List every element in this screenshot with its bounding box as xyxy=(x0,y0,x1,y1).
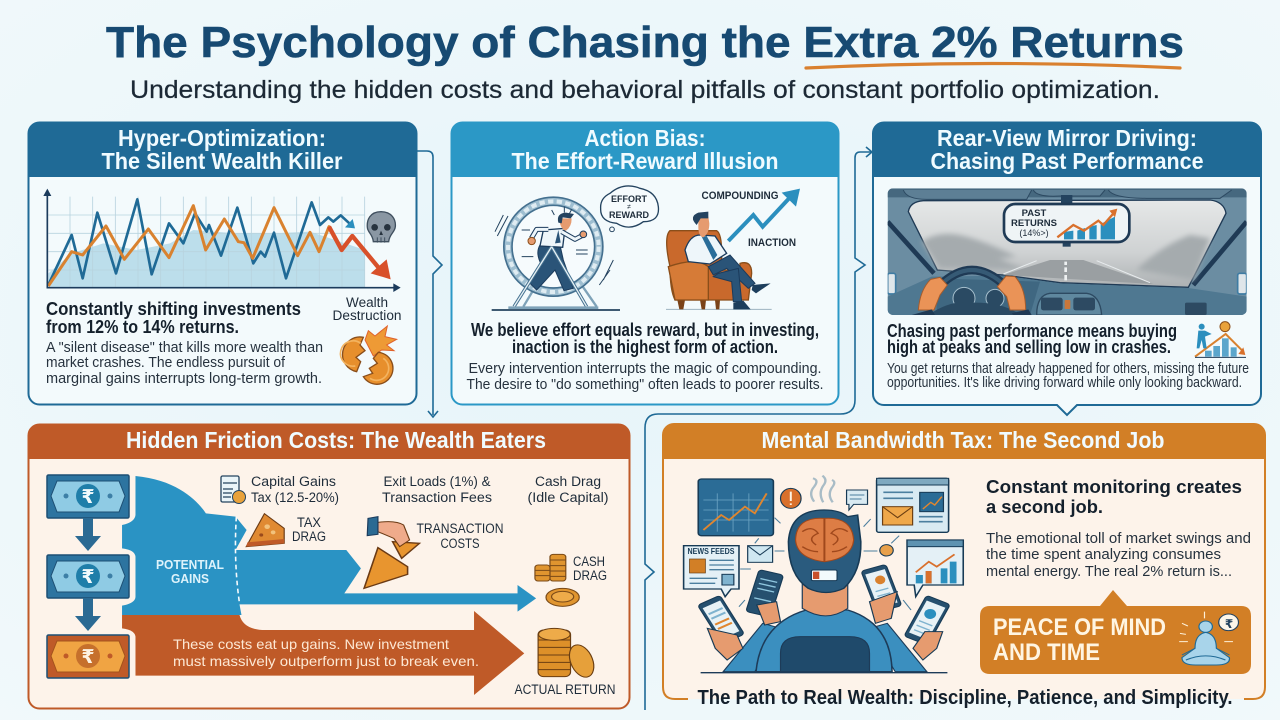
arrow text: must massively outperform just to break even. xyxy=(173,653,479,669)
icon: hand taking slice xyxy=(364,517,419,588)
body detail text: marginal gains interrupts long-term growth. xyxy=(46,370,322,387)
panel heading xyxy=(102,125,343,174)
phones xyxy=(698,595,744,644)
panel heading: Hyper-Optimization: xyxy=(118,125,326,151)
body bold text xyxy=(46,299,301,337)
thought bubble: effort not reward: EFFORT xyxy=(611,194,647,204)
body detail text xyxy=(46,339,323,387)
label: exit loads: Transaction Fees xyxy=(382,490,492,505)
label: transaction costs xyxy=(416,521,504,551)
icon: climbing investor with peak xyxy=(1195,322,1246,357)
body bold text: inaction is the highest form of action. xyxy=(512,337,778,357)
label: cash drag: CASH xyxy=(573,554,605,569)
panel: rear-view mirror driving xyxy=(873,122,1261,415)
icon: tax document xyxy=(221,476,246,504)
arms and body xyxy=(723,623,927,672)
body detail text xyxy=(466,360,824,393)
panel frame xyxy=(663,424,1265,699)
thought bubble: effort not reward: ≠ xyxy=(627,204,631,211)
arrow text xyxy=(173,636,479,669)
arrow: down xyxy=(75,598,101,631)
label: cash drag xyxy=(573,554,607,583)
panel heading: Chasing Past Performance xyxy=(930,148,1204,174)
label: exit loads: Exit Loads (1%) & xyxy=(384,474,490,489)
subtitle: Understanding the hidden costs and behavioral pitfalls of constant portfolio optimization. xyxy=(130,76,1160,104)
arrow: down xyxy=(75,518,101,551)
coin xyxy=(880,545,893,556)
flow: actual return arrow xyxy=(122,611,524,695)
label: cash drag idle capital xyxy=(528,474,608,505)
news panel xyxy=(684,546,739,597)
panel frame with bottom notch xyxy=(873,122,1261,415)
label: cash drag idle capital: (Idle Capital) xyxy=(528,490,608,505)
illustration: man relaxing in armchair xyxy=(666,189,800,309)
body bold text xyxy=(887,321,1177,357)
body bold text: high at peaks and selling low in crashes. xyxy=(887,337,1171,357)
label: cash drag: DRAG xyxy=(573,568,607,583)
hands xyxy=(707,592,943,660)
label: exit loads xyxy=(382,474,492,505)
body detail text: mental energy. The real 2% return is... xyxy=(986,563,1232,580)
label: capital gains tax xyxy=(251,474,339,505)
flow: potential gains funnel xyxy=(122,476,536,615)
panel: action bias xyxy=(451,122,839,404)
panel frame xyxy=(28,122,416,404)
closing tagline: The Path to Real Wealth: Discipline, Patience, and Simplicity. xyxy=(698,687,1232,709)
label: potential gains: POTENTIAL xyxy=(156,557,224,572)
chat bubble xyxy=(847,490,868,510)
illustration: overwhelmed investor with screens and phones xyxy=(684,476,963,673)
alert bubble xyxy=(781,488,801,508)
callout: peace of mind and time: PEACE OF MIND xyxy=(993,614,1166,641)
label: compounding: COMPOUNDING xyxy=(702,190,778,202)
title: The Psychology of Chasing the Extra 2% Returns xyxy=(106,18,1184,67)
body bold text: a second job. xyxy=(986,497,1103,517)
panel header band xyxy=(873,122,1261,177)
body detail text: Every intervention interrupts the magic of compounding. xyxy=(468,360,822,377)
label: tax drag xyxy=(292,515,326,544)
panel heading xyxy=(930,125,1204,174)
thought bubble: effort not reward xyxy=(601,186,658,232)
banknote: bottom orange: ₹ xyxy=(81,646,95,668)
callout: peace of mind and time: AND TIME xyxy=(993,639,1100,666)
panel heading: The Effort-Reward Illusion xyxy=(512,148,778,174)
body bold text: We believe effort equals reward, but in investing, xyxy=(471,320,819,340)
body bold text xyxy=(471,320,819,357)
callout: peace of mind and time xyxy=(980,590,1251,674)
label: transaction costs: COSTS xyxy=(440,536,480,551)
illustration: overwhelmed investor with screens and phones: NEWS FEEDS xyxy=(688,546,735,556)
label: cash drag idle capital: Cash Drag xyxy=(535,474,601,489)
banknote: top xyxy=(47,475,129,518)
body detail text xyxy=(887,360,1249,391)
illustration: rear-view mirror: RETURNS xyxy=(1011,218,1057,229)
label: tax drag: TAX xyxy=(297,515,321,530)
label: tax drag: DRAG xyxy=(292,529,326,544)
panel header band xyxy=(663,424,1265,459)
banknote: middle xyxy=(47,555,129,598)
icon: skull xyxy=(367,212,395,243)
panel heading xyxy=(512,125,778,174)
label: wealth destruction: Destruction xyxy=(332,308,402,323)
body detail text: The desire to "do something" often leads to poorer results. xyxy=(466,376,824,393)
panel header band xyxy=(28,122,417,177)
connector arrows between panels xyxy=(416,147,873,710)
label: inaction: INACTION xyxy=(748,237,796,249)
body bold text: Constant monitoring creates xyxy=(986,477,1242,497)
envelope xyxy=(748,546,773,562)
label: potential gains xyxy=(156,557,224,586)
panel heading: Mental Bandwidth Tax: The Second Job xyxy=(762,427,1164,453)
body detail text xyxy=(986,530,1251,580)
icon: broken coin xyxy=(340,326,397,384)
label: wealth destruction: Wealth xyxy=(346,295,388,310)
illustration: rear-view mirror xyxy=(1004,195,1129,247)
body bold text: Chasing past performance means buying xyxy=(887,321,1177,341)
body detail text: A "silent disease" that kills more wealth than xyxy=(46,339,323,356)
thought bubble: effort not reward: REWARD xyxy=(609,210,649,220)
icon: large coin stack xyxy=(538,628,598,680)
label: potential gains: GAINS xyxy=(171,571,209,586)
label: capital gains tax: Tax (12.5-20%) xyxy=(251,490,339,505)
body detail text: market crashes. The endless pursuit of xyxy=(46,354,286,371)
banknote: top: ₹ xyxy=(81,486,95,508)
body detail text: the time spent analyzing consumes xyxy=(986,546,1221,563)
banknote: bottom orange xyxy=(47,635,129,678)
body bold text: from 12% to 14% returns. xyxy=(46,317,239,337)
banknote: middle: ₹ xyxy=(81,566,95,588)
panel heading: Rear-View Mirror Driving: xyxy=(937,125,1197,151)
panel: hidden friction costs xyxy=(28,424,630,708)
label: transaction costs: TRANSACTION xyxy=(416,521,504,536)
body bold text xyxy=(986,477,1242,517)
label: actual return: ACTUAL RETURN xyxy=(514,682,616,697)
steam xyxy=(811,476,834,502)
panel: hyper-optimization xyxy=(28,122,417,404)
illustration: car interior and foggy road xyxy=(888,188,1247,315)
panel header band xyxy=(28,424,630,459)
body bold text: Constantly shifting investments xyxy=(46,299,301,319)
panel: mental bandwidth tax xyxy=(663,424,1265,709)
panel heading: The Silent Wealth Killer xyxy=(102,148,343,174)
illustration: rear-view mirror: (14%>) xyxy=(1019,228,1049,238)
panel header band xyxy=(451,122,839,177)
panel frame xyxy=(28,424,630,708)
icon: tax slice xyxy=(246,514,284,547)
panel heading: Action Bias: xyxy=(584,125,706,151)
icon: small coin stack xyxy=(535,554,579,606)
arrow text: These costs eat up gains. New investment xyxy=(173,636,449,652)
callout: peace of mind and time: ₹ xyxy=(1225,617,1233,631)
screen top left xyxy=(698,479,773,536)
panel heading: Hidden Friction Costs: The Wealth Eaters xyxy=(126,427,546,453)
body detail text: The emotional toll of market swings and xyxy=(986,530,1251,547)
label: wealth destruction xyxy=(332,295,402,323)
illustration: rear-view mirror: PAST xyxy=(1022,208,1047,219)
right chart window xyxy=(907,540,963,597)
icon: meditating figure xyxy=(1179,612,1239,665)
illustration: man running in hamster wheel xyxy=(492,197,620,310)
label: capital gains tax: Capital Gains xyxy=(251,474,336,489)
screen top right xyxy=(877,478,949,532)
panel frame xyxy=(452,122,838,404)
line chart: volatile returns xyxy=(43,189,401,292)
